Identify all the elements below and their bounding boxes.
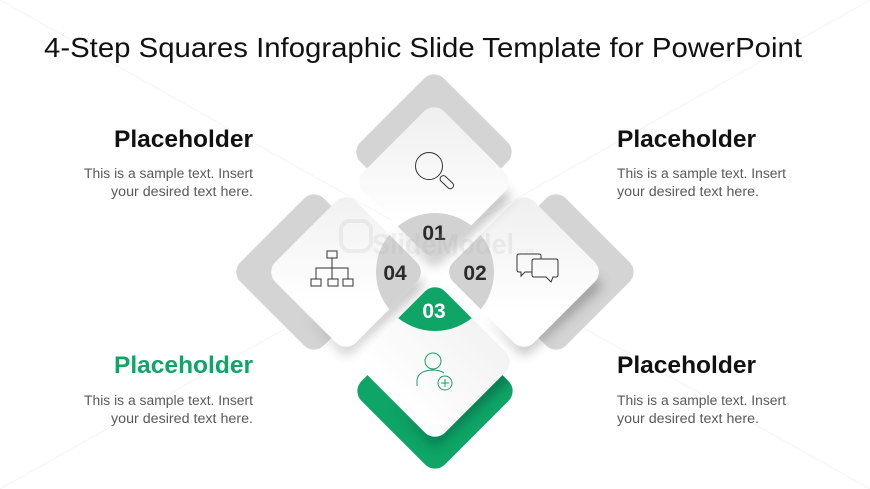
text block: top left: Placeholder bbox=[114, 126, 253, 153]
panel: step 1 background square bbox=[351, 69, 517, 235]
text block: bottom right: This is a sample text. Insert bbox=[617, 393, 786, 408]
text block: bottom right bbox=[617, 352, 786, 426]
text block: top left bbox=[84, 126, 253, 199]
icon: magnifier bbox=[416, 152, 455, 190]
step 2 number segment bbox=[449, 234, 494, 310]
panel: step 3 background square bbox=[352, 308, 518, 474]
watermark bbox=[341, 221, 534, 261]
panel: step 2 background square bbox=[473, 189, 639, 355]
panel: step 2 white square bbox=[443, 191, 605, 355]
icon: org chart bbox=[311, 251, 353, 286]
text block: top right: your desired text here. bbox=[617, 184, 759, 199]
icon: chat bubbles bbox=[517, 254, 558, 282]
step 3 number segment: 03 bbox=[422, 300, 446, 323]
icon: add user bbox=[417, 353, 452, 390]
text block: bottom left: your desired text here. bbox=[111, 411, 253, 426]
step 4 number segment bbox=[376, 234, 421, 310]
text block: bottom left bbox=[84, 352, 253, 426]
watermark: SlideModel bbox=[372, 229, 514, 261]
text block: top right: Placeholder bbox=[617, 126, 756, 153]
text block: bottom left: Placeholder bbox=[114, 352, 253, 379]
text block: top right bbox=[617, 126, 786, 199]
step 1 number segment bbox=[398, 213, 471, 257]
step 4 number segment: 04 bbox=[383, 262, 407, 285]
text block: top right: This is a sample text. Insert bbox=[617, 166, 786, 181]
step 1 number segment: 01 bbox=[422, 222, 446, 245]
panel: step 4 background square bbox=[231, 189, 397, 355]
step 2 number segment: 02 bbox=[463, 262, 487, 285]
panel: step 4 white square bbox=[265, 191, 427, 355]
text block: top left: This is a sample text. Insert bbox=[84, 166, 253, 181]
text block: top left: your desired text here. bbox=[111, 184, 253, 199]
step 3 number segment bbox=[398, 287, 472, 331]
text block: bottom right: your desired text here. bbox=[617, 411, 759, 426]
panel: step 1 white square bbox=[353, 101, 515, 266]
text block: bottom right: Placeholder bbox=[617, 352, 756, 379]
panel: step 3 white square bbox=[368, 318, 511, 449]
title: 4-Step Squares Infographic Slide Template for PowerPoint bbox=[44, 32, 802, 63]
watermark: .com bbox=[514, 246, 534, 256]
text block: bottom left: This is a sample text. Insert bbox=[84, 393, 253, 408]
